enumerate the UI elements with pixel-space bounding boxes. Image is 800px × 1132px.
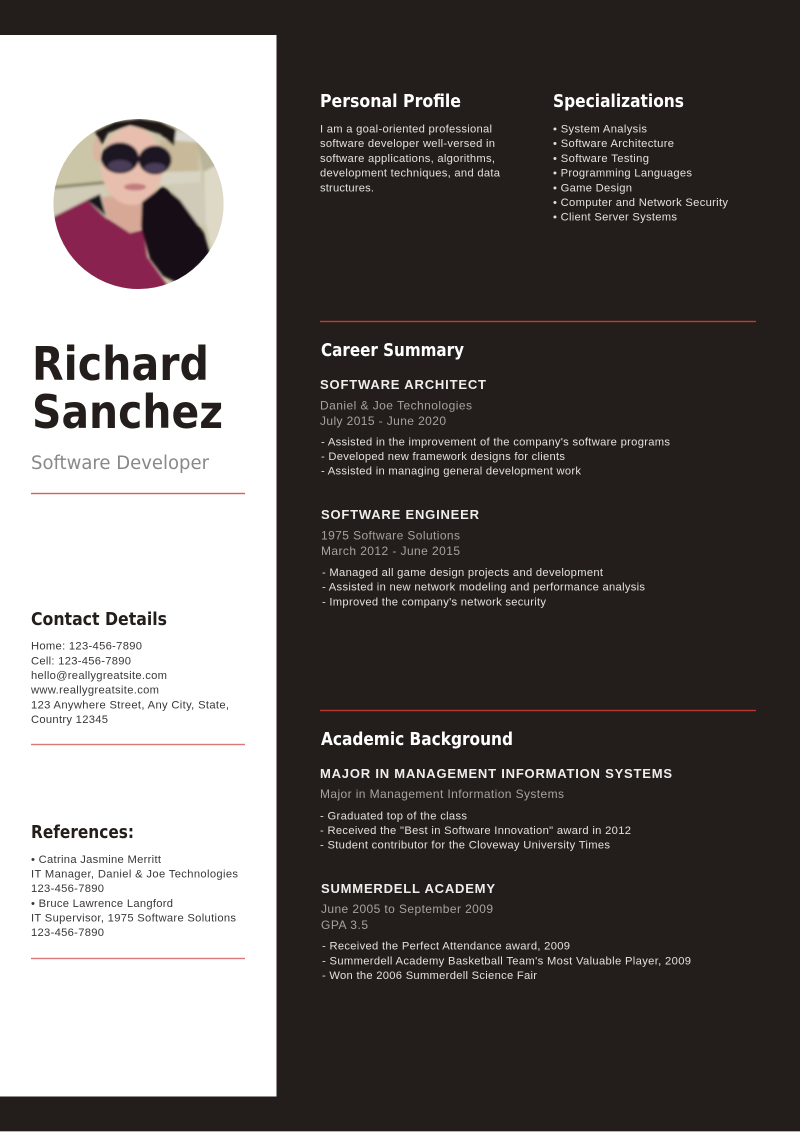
job: software engineer: - Improved the company's network security xyxy=(322,596,546,608)
job: software architect xyxy=(320,377,670,478)
text: contact details: Cell: 123-456-7890 xyxy=(31,655,131,667)
education: management information systems xyxy=(320,766,672,852)
list: specializations: • Software Architecture xyxy=(553,138,674,150)
list: specializations: • Computer and Network Security xyxy=(553,197,728,209)
education: management information systems: - Received the "Best in Software Innovation" award in 2012 xyxy=(320,825,631,837)
job: software architect: SOFTWARE ARCHITECT xyxy=(320,377,486,392)
list: specializations: • Software Testing xyxy=(553,153,649,165)
list: specializations xyxy=(553,124,728,224)
education: management information systems: - Graduated top of the class xyxy=(320,810,467,822)
job title: Software Developer xyxy=(31,453,209,474)
job: software engineer xyxy=(321,507,645,608)
name xyxy=(32,337,223,439)
heading: personal profile: Personal Profile xyxy=(320,92,461,112)
job: software engineer: 1975 Software Solutions xyxy=(321,529,460,543)
text: references: • Bruce Lawrence Langford xyxy=(31,898,173,910)
text: references: • Catrina Jasmine Merritt xyxy=(31,854,162,866)
education: management information systems: Major in Management Information Systems xyxy=(320,787,564,801)
heading: career summary: Career Summary xyxy=(321,341,465,361)
text: references: 123-456-7890 xyxy=(31,927,104,939)
education: summerdell academy: June 2005 to September 2009 xyxy=(321,902,493,916)
job: software architect: Daniel & Joe Technologies xyxy=(320,398,472,412)
heading: references: References: xyxy=(31,822,134,843)
text: references: IT Manager, Daniel & Joe Technologies xyxy=(31,868,238,880)
job: software engineer: SOFTWARE ENGINEER xyxy=(321,507,480,522)
list: specializations: • Programming Languages xyxy=(553,168,692,180)
job: software architect: - Assisted in managing general development work xyxy=(321,466,581,478)
text: references xyxy=(31,854,238,939)
education: summerdell academy xyxy=(321,881,691,982)
list: specializations: • Game Design xyxy=(553,182,632,194)
heading: contact details: Contact Details xyxy=(31,609,167,630)
heading: specializations: Specializations xyxy=(553,92,684,112)
list: specializations: • System Analysis xyxy=(553,124,647,136)
text: personal profile: software applications, algorithms, xyxy=(320,153,495,165)
text: contact details: Home: 123-456-7890 xyxy=(31,641,142,653)
education: summerdell academy: - Received the Perfect Attendance award, 2009 xyxy=(322,941,570,953)
job: software engineer: - Assisted in new network modeling and performance analysis xyxy=(322,582,645,594)
text: personal profile xyxy=(320,124,501,194)
list: specializations: • Client Server Systems xyxy=(553,212,677,224)
education: summerdell academy: SUMMERDELL ACADEMY xyxy=(321,881,495,896)
text: contact details xyxy=(30,641,229,726)
panel: left sidebar xyxy=(0,35,276,1096)
heading: academic background: Academic Background xyxy=(321,730,513,750)
photo: portrait in circle xyxy=(50,119,226,292)
text: contact details: Country 12345 xyxy=(31,714,108,726)
job: software architect: July 2015 - June 2020 xyxy=(320,414,446,428)
text: personal profile: development techniques, and data xyxy=(320,168,501,180)
text: contact details: www.reallygreatsite.com xyxy=(30,685,159,697)
education: summerdell academy: GPA 3.5 xyxy=(321,918,368,932)
education: management information systems: MAJOR IN MANAGEMENT INFORMATION SYSTEMS xyxy=(320,766,672,781)
text: personal profile: I am a goal-oriented professional xyxy=(320,124,492,136)
text: references: IT Supervisor, 1975 Software Solutions xyxy=(31,912,236,924)
name: Sanchez xyxy=(32,385,223,439)
education: management information systems: - Student contributor for the Cloveway University Times xyxy=(320,840,610,852)
text: personal profile: structures. xyxy=(320,182,374,194)
text: contact details: hello@reallygreatsite.com xyxy=(31,670,167,682)
name: Richard xyxy=(32,337,209,391)
text: references: 123-456-7890 xyxy=(31,883,104,895)
text: personal profile: software developer well-versed in xyxy=(320,138,495,150)
job: software engineer: March 2012 - June 2015 xyxy=(321,544,460,558)
job: software architect: - Developed new framework designs for clients xyxy=(321,451,565,463)
education: summerdell academy: - Summerdell Academy Basketball Team's Most Valuable Player, 2009 xyxy=(322,955,691,967)
text: contact details: 123 Anywhere Street, Any City, State, xyxy=(31,699,229,711)
job: software architect: - Assisted in the improvement of the company's software programs xyxy=(321,436,670,448)
job: software engineer: - Managed all game design projects and development xyxy=(322,567,604,579)
education: summerdell academy: - Won the 2006 Summerdell Science Fair xyxy=(322,970,537,982)
